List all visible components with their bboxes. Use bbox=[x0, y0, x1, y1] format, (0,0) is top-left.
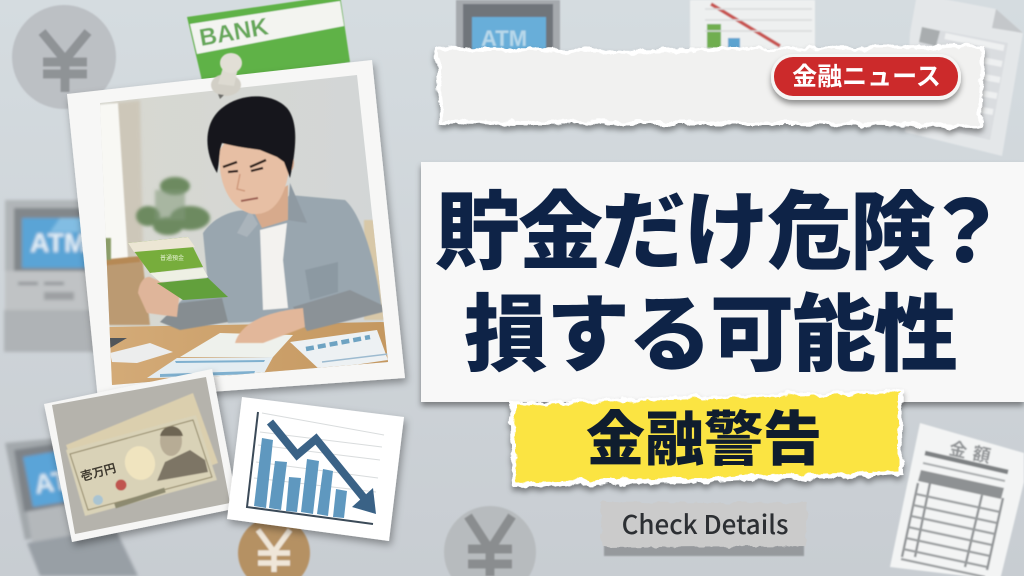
banknote front bbox=[66, 415, 217, 516]
icon: ATM bottom left bbox=[5, 436, 138, 576]
badge: financial news bbox=[771, 54, 961, 100]
hands bbox=[138, 277, 180, 317]
icon: form document bottom right: 金額 bbox=[947, 438, 998, 468]
icon: falling chart document top bbox=[690, 0, 815, 50]
yellow torn banner bbox=[510, 390, 903, 487]
cabinet bbox=[100, 238, 150, 325]
photo card: worried man bbox=[67, 53, 405, 400]
hand on papers bbox=[235, 308, 305, 343]
photo scene bbox=[100, 75, 388, 385]
brows and eyes bbox=[223, 160, 266, 167]
icon: ATM left bbox=[4, 200, 105, 352]
mouth and nose bbox=[241, 198, 258, 201]
neck and face bbox=[207, 96, 295, 228]
icon: ATM left: ATM bbox=[30, 228, 86, 258]
axis bbox=[247, 412, 373, 524]
icon: push pin bbox=[211, 53, 242, 99]
bars bbox=[254, 438, 347, 518]
papers on desk bbox=[147, 357, 273, 378]
photo card: falling bar chart bbox=[227, 397, 404, 541]
headline line 1: 貯金だけ危険 bbox=[435, 186, 935, 281]
icon: bank card: BANK bbox=[197, 13, 271, 52]
hair bbox=[207, 96, 295, 178]
collar bbox=[238, 213, 258, 236]
icon: ATM bottom left: ATM bbox=[32, 461, 93, 500]
icon: grey yen coin bbox=[444, 506, 536, 576]
photo card: yen banknotes bbox=[44, 369, 238, 542]
passbook bbox=[128, 237, 228, 300]
headline panel bbox=[421, 162, 1024, 402]
badge: financial news: 金融ニュース bbox=[792, 63, 941, 91]
icon: yen coin top left bbox=[12, 5, 116, 109]
icon: ATM top bbox=[456, 0, 560, 51]
banknote text: 壱万円 bbox=[79, 460, 118, 484]
yellow banner text: 金融警告 bbox=[586, 407, 822, 473]
torn tag: check details bbox=[600, 502, 808, 556]
icon: bank card bbox=[187, 0, 350, 85]
falling arrow bbox=[270, 422, 376, 514]
icon: document top right bbox=[905, 0, 1023, 156]
t-shirt bbox=[260, 223, 288, 310]
torn paper banner bbox=[435, 44, 985, 128]
shirt bbox=[160, 183, 383, 331]
icon: form document bottom right bbox=[890, 423, 1024, 576]
passbook: 普通預金 bbox=[160, 254, 184, 262]
icon: ATM top: ATM bbox=[481, 26, 527, 51]
headline line 1: ？ bbox=[923, 186, 1006, 281]
banknote back bbox=[66, 393, 218, 510]
icon: gold yen coin bbox=[238, 517, 310, 576]
torn tag: check details: Check Details bbox=[622, 505, 788, 542]
plant bbox=[136, 177, 210, 235]
laptop and calculator bbox=[110, 338, 127, 348]
headline line 2: 損する可能性 bbox=[464, 288, 956, 382]
